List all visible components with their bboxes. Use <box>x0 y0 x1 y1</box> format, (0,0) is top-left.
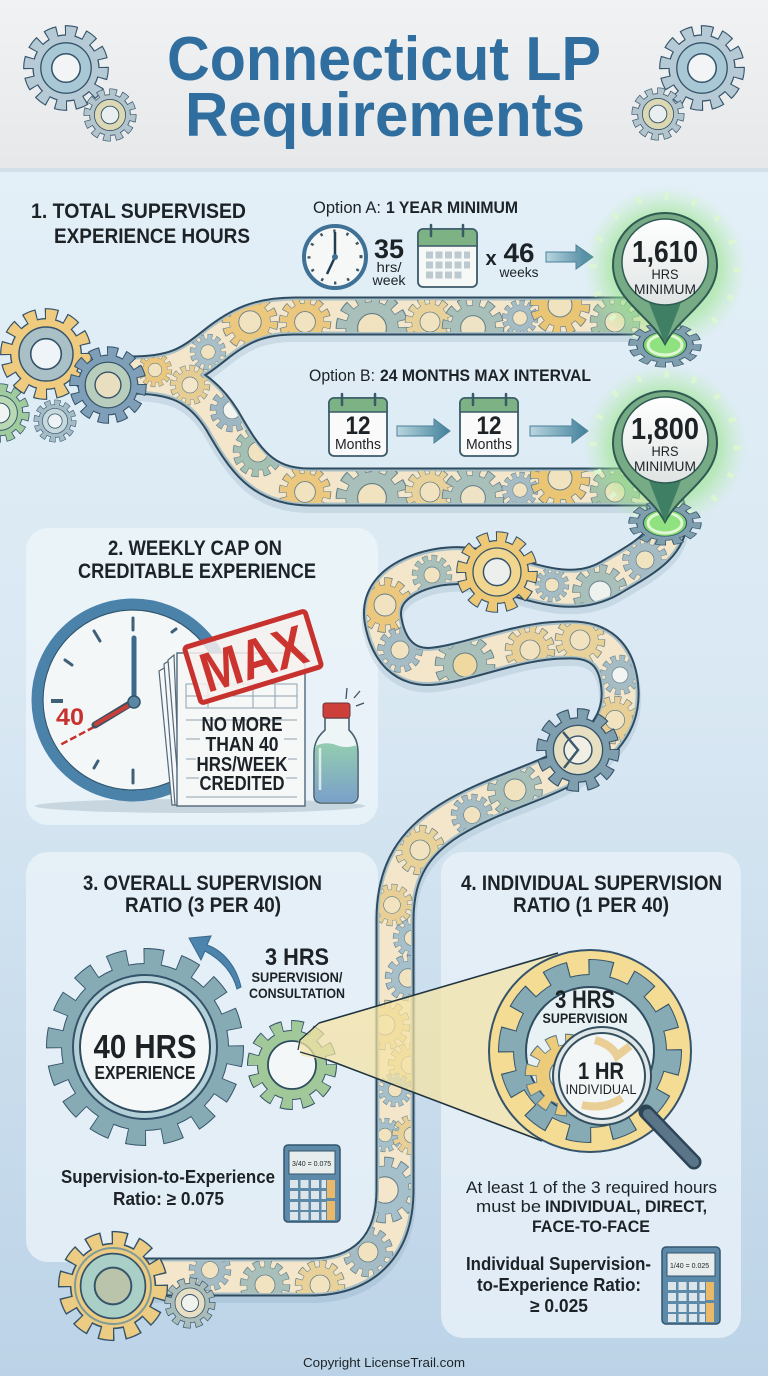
icon: bottom yellow gear <box>67 1240 159 1332</box>
icon: header gears right <box>636 32 738 136</box>
heading: section 2: 2. WEEKLY CAP ON <box>108 537 282 560</box>
icon: big 40 hrs gear: EXPERIENCE <box>94 1063 196 1083</box>
text: 3 hrs supervision consultation: 3 HRS <box>265 944 329 971</box>
text: option A label <box>313 198 518 217</box>
icon: 12 months calendar first: 12 <box>346 412 370 440</box>
zoom cone <box>298 953 558 1141</box>
icon: paper stack with text: HRS/WEEK <box>196 754 288 776</box>
heading: section 2: CREDITABLE EXPERIENCE <box>78 560 316 583</box>
icon: pin 1,610 hrs: MINIMUM <box>634 281 696 297</box>
icon: left gear cluster <box>0 315 141 439</box>
heading: section 1: 1. TOTAL SUPERVISED <box>31 200 246 223</box>
icon: pin 1,610 hrs: HRS <box>652 266 678 282</box>
heading: section 4: 4. INDIVIDUAL SUPERVISION <box>461 872 722 895</box>
icon: paper stack with text: NO MORE <box>202 714 282 736</box>
heading: section 1: EXPERIENCE HOURS <box>54 225 250 248</box>
footer copyright: Copyright LicenseTrail.com <box>303 1355 465 1370</box>
icon: enlarged gear with magnifier: INDIVIDUAL <box>566 1081 637 1097</box>
icon: calculator 0.075 <box>284 1145 340 1222</box>
title: Connecticut LP <box>167 25 601 94</box>
text: supervision ratio: Ratio: ≥ 0.075 <box>113 1189 224 1209</box>
panel: overall supervision background <box>26 852 378 1262</box>
text: option A label: 1 YEAR MINIMUM <box>386 198 518 217</box>
icon: calendar <box>418 225 477 287</box>
icon: pin 1,800 hrs: HRS <box>652 443 678 459</box>
text: individual supervision ratio: ≥ 0.025 <box>530 1296 588 1316</box>
header band <box>0 0 768 172</box>
icon: serpentine clock gear <box>543 715 613 785</box>
text: supervision ratio: Supervision-to-Experience <box>61 1167 275 1187</box>
icon: enlarged gear with magnifier <box>489 950 694 1162</box>
icon: 12 months calendar second <box>460 394 518 456</box>
icon: big 40 hrs gear: 40 HRS <box>94 1028 196 1065</box>
title: Requirements <box>185 81 585 150</box>
heading: section 4 <box>461 872 722 917</box>
panel: weekly cap background <box>26 528 378 825</box>
text: at least 1 of 3 hours <box>466 1178 717 1236</box>
icon: 12 months calendar second: Months <box>466 436 512 453</box>
icon: paper stack with text <box>159 653 305 806</box>
icon: pin 1,610 hrs <box>583 186 747 364</box>
text: at least 1 of 3 hours: must be <box>476 1197 541 1216</box>
text: option B label: Option B: <box>309 366 375 385</box>
icon: small green gear <box>254 1027 330 1103</box>
icon: calculator 0.025: 1/40 = 0.025 <box>670 1263 709 1270</box>
heading: section 2 <box>78 537 316 583</box>
icon: pin 1,800 hrs <box>583 364 747 542</box>
text: individual supervision ratio <box>466 1254 651 1316</box>
text: times 46 weeks: x <box>485 248 497 270</box>
text: 3 hrs supervision consultation: CONSULTATION <box>249 985 345 1001</box>
heading: section 3: 3. OVERALL SUPERVISION <box>83 872 322 895</box>
icon: pin 1,610 hrs: 1,610 <box>632 234 698 269</box>
text: 35 hrs per week: hrs/ <box>376 259 402 275</box>
text: 3 hrs supervision consultation <box>249 944 345 1001</box>
text: times 46 weeks: 46 <box>504 238 534 268</box>
arrow: between calendars <box>397 419 450 443</box>
heading: section 1 <box>31 200 250 248</box>
icon: large wall clock: 40 <box>56 704 84 731</box>
text: option B label: 24 MONTHS MAX INTERVAL <box>380 366 591 385</box>
text: individual supervision ratio: Individual Supervision- <box>466 1254 651 1274</box>
panel: individual supervision background <box>441 852 741 1338</box>
icon: paper stack with text: CREDITED <box>200 773 284 795</box>
icon: water bottle <box>314 688 364 803</box>
text: 3 hrs supervision consultation: SUPERVISION/ <box>252 969 343 985</box>
text: times 46 weeks <box>485 238 538 280</box>
icon: 12 months calendar first: Months <box>335 436 381 453</box>
icon: enlarged gear with magnifier: 1 HR <box>578 1058 624 1085</box>
winding belt pathway <box>113 280 668 1306</box>
text: 35 hrs per week <box>371 234 407 288</box>
icon: enlarged gear with magnifier: SUPERVISION <box>542 1010 628 1026</box>
icon: paper stack with text: THAN 40 <box>206 734 278 756</box>
icon: pin 1,800 hrs: 1,800 <box>631 411 699 446</box>
arrow: curved rotation arrow <box>189 936 241 989</box>
icon: calculator 0.025 <box>662 1247 720 1324</box>
icon: serpentine yellow gear <box>463 538 531 606</box>
icon: header gears left <box>30 32 132 137</box>
icon: calculator 0.075: 3/40 = 0.075 <box>292 1161 331 1168</box>
icon: 12 months calendar first <box>329 394 387 456</box>
heading: section 4: RATIO (1 PER 40) <box>513 894 669 917</box>
icon: pin 1,800 hrs: MINIMUM <box>634 458 696 474</box>
heading: section 3: RATIO (3 PER 40) <box>125 894 281 917</box>
arrow: calendar to pin <box>530 419 588 443</box>
text: 35 hrs per week: week <box>371 272 407 288</box>
heading: section 3 <box>83 872 322 917</box>
text: at least 1 of 3 hours: FACE-TO-FACE <box>532 1217 650 1236</box>
text: 35 hrs per week: 35 <box>374 234 404 264</box>
title <box>167 25 601 150</box>
arrow: option A to pin <box>546 245 593 269</box>
icon: large wall clock <box>35 604 365 813</box>
icon: MAX stamp: MAX <box>193 613 314 704</box>
text: at least 1 of 3 hours: INDIVIDUAL, DIRECT, <box>545 1197 707 1216</box>
text: at least 1 of 3 hours: At least 1 of the 3 required hours <box>466 1178 717 1197</box>
text: individual supervision ratio: to-Experience Ratio: <box>477 1275 641 1295</box>
icon: big 40 hrs gear <box>55 957 235 1137</box>
text: times 46 weeks: weeks <box>499 264 538 280</box>
icon: bottom small gear <box>168 1282 212 1324</box>
icon: 12 months calendar second: 12 <box>476 412 502 440</box>
text: supervision ratio <box>61 1167 275 1209</box>
text: option A label: Option A: <box>313 198 381 217</box>
icon: clock option A <box>304 226 366 288</box>
icon: enlarged gear with magnifier: 3 HRS <box>555 986 615 1014</box>
